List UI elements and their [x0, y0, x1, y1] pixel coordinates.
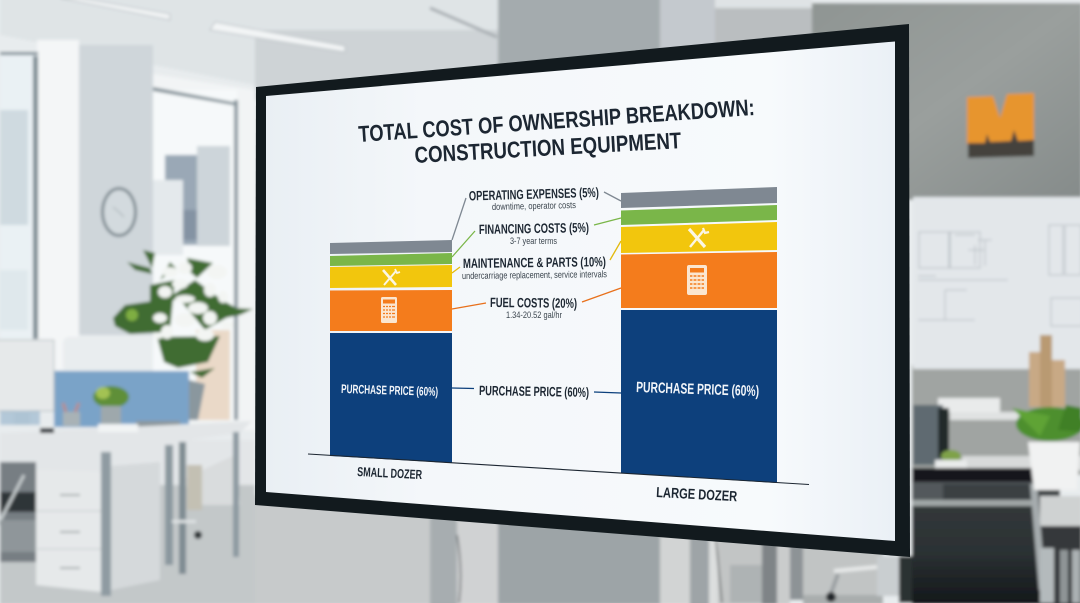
- icon: wrench and screwdriver: [689, 228, 709, 247]
- desk plant: [93, 386, 129, 425]
- label: operating expenses: [469, 185, 599, 213]
- small dozer stacked bar: [330, 240, 452, 463]
- potted plant: [113, 250, 253, 378]
- label: maintenance and parts: undercarriage replacement, service intervals: [462, 269, 607, 282]
- segment: purchase price: [621, 310, 777, 483]
- ceiling: [0, 0, 500, 85]
- left wall section: [79, 45, 153, 335]
- segment: maintenance: [621, 222, 777, 253]
- label: operating expenses: downtime, operator costs: [492, 200, 576, 213]
- centre window: [153, 74, 255, 430]
- upper wall between window and column: [255, 30, 498, 100]
- title: TOTAL COST OF OWNERSHIP BREAKDOWN:: [358, 94, 755, 147]
- concrete wall: [812, 3, 1080, 200]
- segment: operating expenses: [621, 187, 777, 208]
- ceiling beam: [430, 8, 497, 37]
- label: financing costs: 3-7 year terms: [510, 236, 557, 247]
- label: operating expenses: OPERATING EXPENSES (5%): [469, 185, 599, 203]
- icon: wrench and screwdriver: [383, 269, 400, 285]
- wall clock: [101, 187, 137, 237]
- monitor stand poles: [430, 510, 722, 603]
- screen: [266, 42, 895, 541]
- back shelf: [913, 398, 1020, 465]
- segment: financing: [621, 205, 777, 225]
- white chair back: [63, 337, 153, 373]
- bar label: purchase price: PURCHASE PRICE (60%): [341, 382, 438, 399]
- monitor frame: [255, 24, 910, 557]
- dark chair and desk foreground: [912, 468, 1080, 603]
- title: [358, 94, 755, 168]
- segment: financing: [330, 253, 452, 266]
- title: CONSTRUCTION EQUIPMENT: [414, 127, 682, 168]
- axis label: small dozer: SMALL DOZER: [357, 464, 423, 482]
- rear right counter: [962, 456, 1080, 470]
- segment: maintenance: [330, 265, 452, 288]
- axis label: large dozer: LARGE DOZER: [656, 485, 738, 505]
- office chair below monitor: [826, 556, 912, 603]
- baseline axis: [308, 454, 809, 484]
- segment: fuel: [330, 290, 452, 331]
- label: fuel costs: [490, 295, 577, 321]
- segment: purchase price: [330, 333, 452, 463]
- blue partition: [54, 371, 189, 427]
- lower wall and floor left: [0, 440, 255, 603]
- icon: calculator: [381, 297, 397, 323]
- central column: [498, 0, 812, 100]
- label: purchase price: PURCHASE PRICE (60%): [479, 383, 589, 400]
- label: fuel costs: 1.34-20.52 gal/hr: [506, 310, 562, 321]
- ceiling lights: [60, 0, 345, 52]
- desk with papers: [0, 421, 252, 574]
- label: financing costs: [479, 220, 589, 247]
- lower centre room: [255, 495, 883, 603]
- right plant in white pot: [1012, 405, 1080, 490]
- filing cabinet: [36, 452, 160, 596]
- icon: calculator: [687, 265, 707, 295]
- large dozer stacked bar: [621, 187, 777, 483]
- small plant: [935, 450, 967, 470]
- label: maintenance and parts: [462, 254, 607, 282]
- whiteboard blueprints: [913, 197, 1080, 369]
- label: fuel costs: FUEL COSTS (20%): [490, 295, 577, 311]
- bar label: purchase price: PURCHASE PRICE (60%): [636, 379, 759, 400]
- label: financing costs: FINANCING COSTS (5%): [479, 220, 589, 237]
- segment: fuel: [621, 252, 777, 308]
- left window: [0, 40, 79, 370]
- lower right wall: [912, 365, 1080, 475]
- segment: operating expenses: [330, 240, 452, 254]
- left monitor: [0, 340, 54, 425]
- plant pot: [189, 380, 205, 420]
- left chair: [0, 462, 36, 562]
- leader lines: [452, 192, 621, 393]
- pen holder: [63, 403, 80, 426]
- chart content: [308, 94, 809, 505]
- orange M logo: M: [969, 86, 1031, 153]
- orange M logo: [967, 86, 1034, 158]
- label: maintenance and parts: MAINTENANCE & PARTS (10%): [463, 254, 606, 271]
- cardboard rolls: [1029, 335, 1065, 407]
